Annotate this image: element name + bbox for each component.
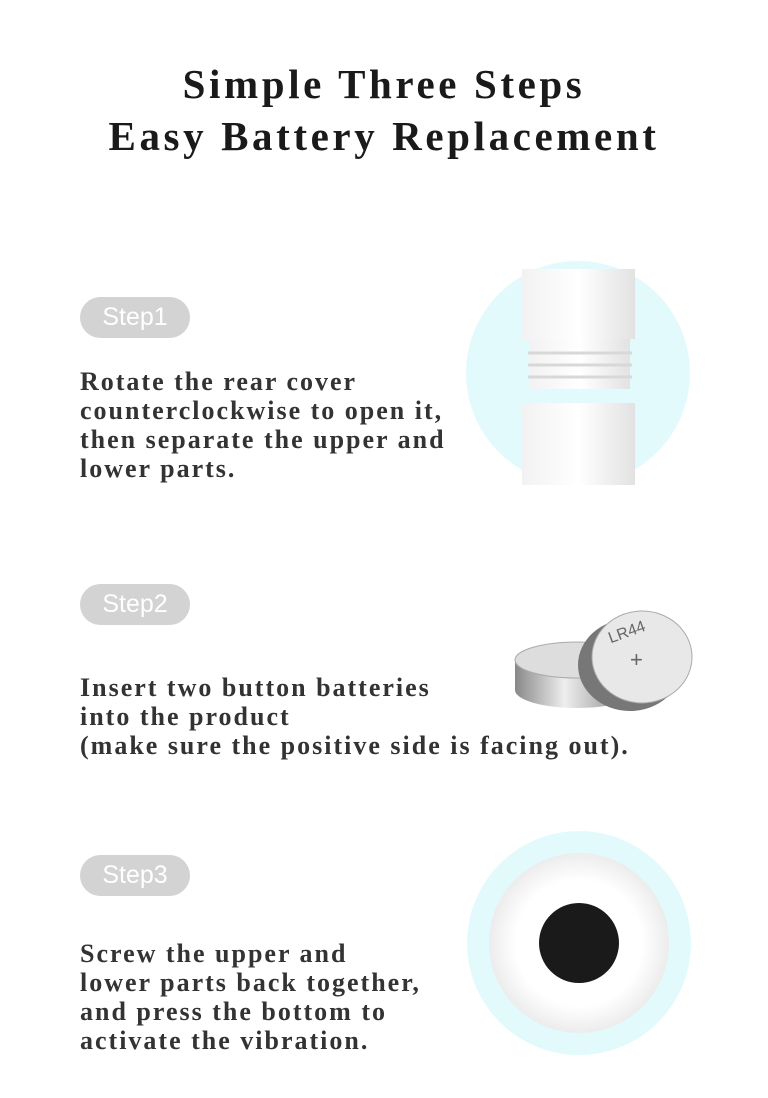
step2 text: into the product	[80, 702, 291, 731]
step3 label: Step3	[102, 861, 168, 889]
step2 text: Insert two button batteries	[80, 673, 431, 702]
icon: button batteries: +	[630, 647, 643, 672]
icon: button batteries	[514, 610, 692, 711]
step1 text: counterclockwise to open it,	[80, 396, 443, 425]
step3 text	[80, 939, 421, 1055]
step3 label	[80, 855, 190, 896]
step3 text: lower parts back together,	[80, 968, 421, 997]
title: Easy Battery Replacement	[109, 113, 659, 159]
step2 label	[80, 584, 190, 625]
step3 text: Screw the upper and	[80, 939, 347, 968]
step1 text	[80, 367, 446, 483]
icon: bottom button	[467, 831, 691, 1055]
step1 text: then separate the upper and	[80, 425, 446, 454]
icon: opened tube	[466, 261, 690, 485]
step1 text: lower parts.	[80, 454, 236, 483]
title: Simple Three Steps	[183, 61, 585, 107]
step1 label: Step1	[102, 303, 168, 331]
step2 text	[80, 673, 630, 760]
step3 text: and press the bottom to	[80, 997, 387, 1026]
step3 text: activate the vibration.	[80, 1026, 369, 1055]
step1 text: Rotate the rear cover	[80, 367, 357, 396]
icon: button batteries: LR44	[606, 618, 648, 647]
step1 label	[80, 297, 190, 338]
title	[109, 61, 659, 159]
step2 text: (make sure the positive side is facing out).	[80, 731, 630, 760]
step2 label: Step2	[102, 590, 168, 618]
